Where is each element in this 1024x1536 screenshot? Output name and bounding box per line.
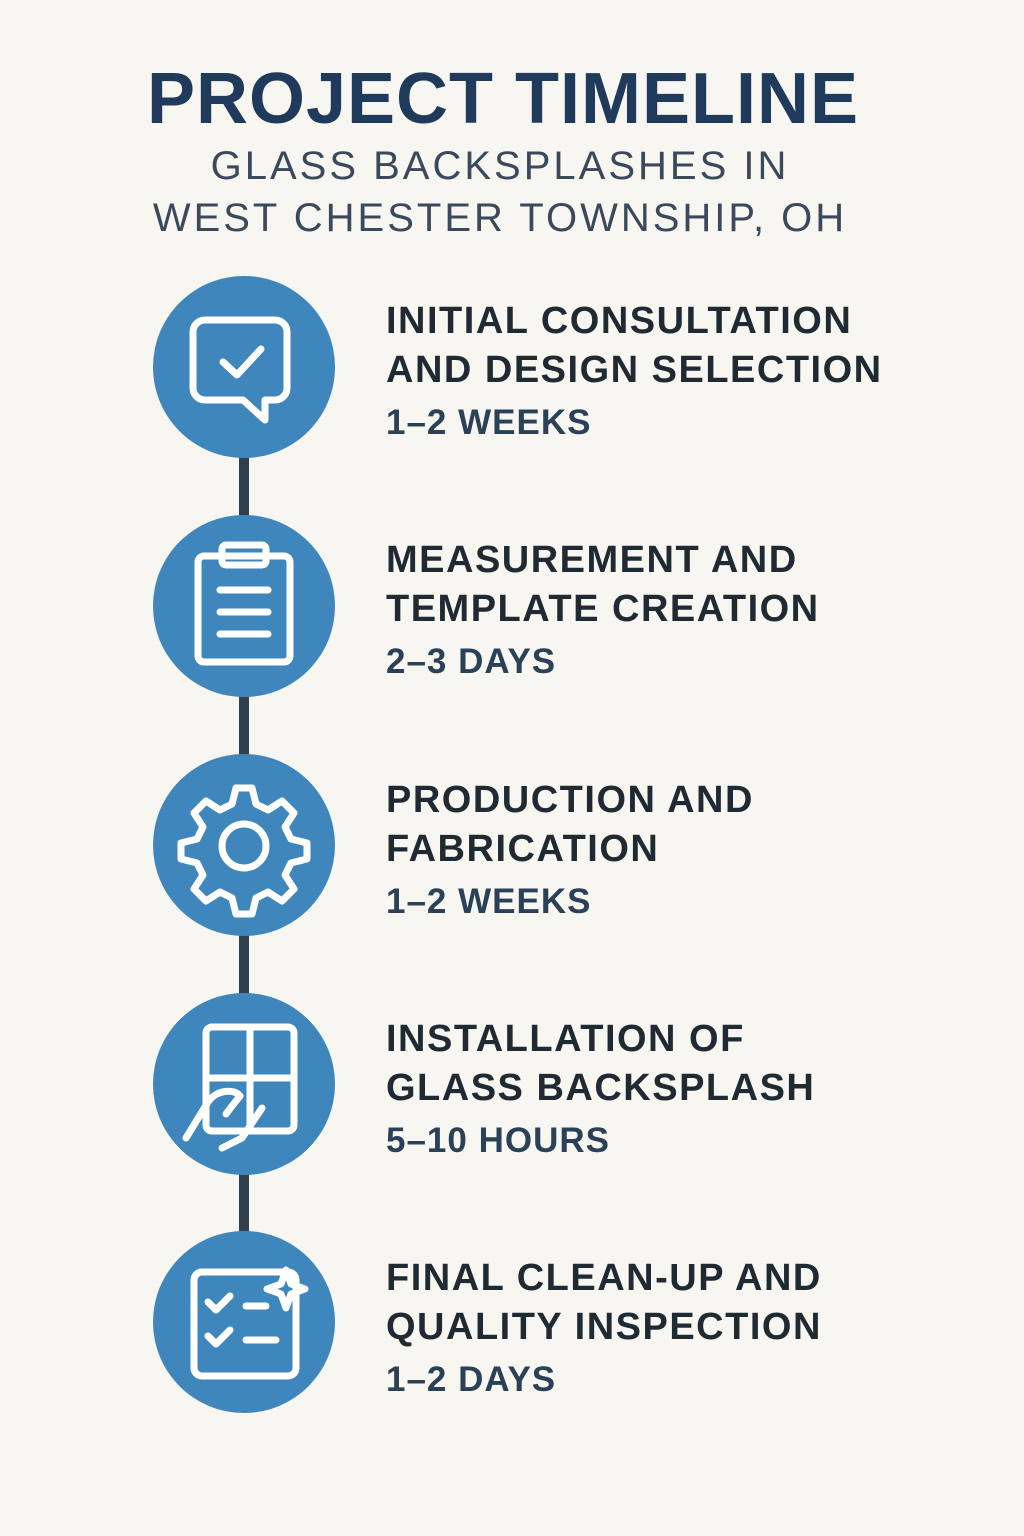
- step 1: 1–2 WEEKS: [386, 403, 591, 442]
- step 2: MEASUREMENT AND: [386, 539, 798, 581]
- step 4: [386, 1018, 815, 1160]
- step 1: AND DESIGN SELECTION: [386, 349, 883, 391]
- icon: clipboard: [198, 545, 290, 662]
- step 5: [386, 1257, 822, 1399]
- subtitle: WEST CHESTER TOWNSHIP, OH: [153, 196, 847, 240]
- icon: gear: [181, 788, 307, 914]
- step 5: QUALITY INSPECTION: [386, 1306, 822, 1348]
- subtitle: [153, 144, 847, 240]
- step 1: [386, 300, 883, 442]
- icon: checklist sparkle: [194, 1270, 305, 1376]
- step 5: FINAL CLEAN-UP AND: [386, 1257, 822, 1299]
- step 1: INITIAL CONSULTATION: [386, 300, 852, 342]
- step 2: TEMPLATE CREATION: [386, 588, 820, 630]
- step 4: 5–10 HOURS: [386, 1121, 610, 1160]
- step 3: PRODUCTION AND: [386, 779, 754, 821]
- step 2: 2–3 DAYS: [386, 642, 556, 681]
- step 3: 1–2 WEEKS: [386, 882, 591, 921]
- subtitle: GLASS BACKSPLASHES IN: [211, 144, 789, 188]
- icon: chat check: [193, 320, 287, 420]
- step 2: [386, 539, 820, 681]
- step 3: FABRICATION: [386, 828, 659, 870]
- step 3: [386, 779, 754, 921]
- step 4: GLASS BACKSPLASH: [386, 1067, 815, 1109]
- title: PROJECT TIMELINE: [147, 59, 859, 139]
- step 4: INSTALLATION OF: [386, 1018, 745, 1060]
- icon: glass hand: [186, 1027, 294, 1148]
- step 5: 1–2 DAYS: [386, 1360, 556, 1399]
